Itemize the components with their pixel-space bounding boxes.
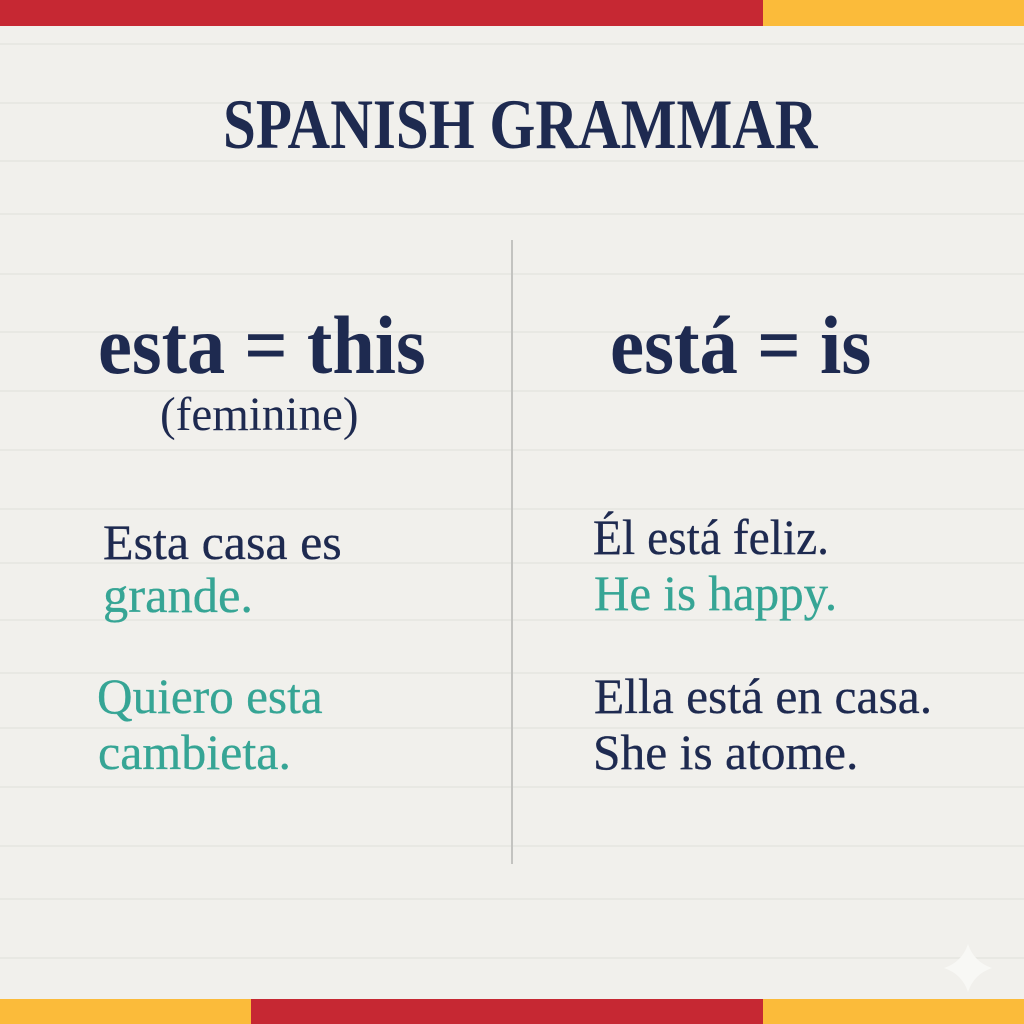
left column note: (feminine): [160, 388, 359, 441]
right column heading: está = is: [610, 299, 871, 391]
right example 1: [593, 509, 837, 621]
left example 2: cambieta.: [98, 724, 291, 780]
left example 1: Esta casa es: [103, 514, 342, 570]
left example 2: Quiero esta: [97, 668, 323, 724]
top colour band: [0, 0, 1024, 26]
right example 2: Ella está en casa.: [594, 668, 932, 724]
right example 1: Él está feliz.: [593, 509, 829, 565]
icon: sparkle: [946, 946, 990, 990]
bottom colour band: [0, 999, 1024, 1024]
left column heading: esta = this: [98, 299, 426, 391]
right example 2: [593, 668, 932, 780]
left example 2: [97, 668, 323, 780]
right example 1: He is happy.: [594, 565, 837, 621]
left example 1: [103, 514, 342, 623]
right example 2: She is atome.: [593, 724, 858, 780]
left example 1: grande.: [103, 567, 253, 623]
center divider: [511, 240, 513, 864]
title: SPANISH GRAMMAR: [223, 86, 818, 164]
